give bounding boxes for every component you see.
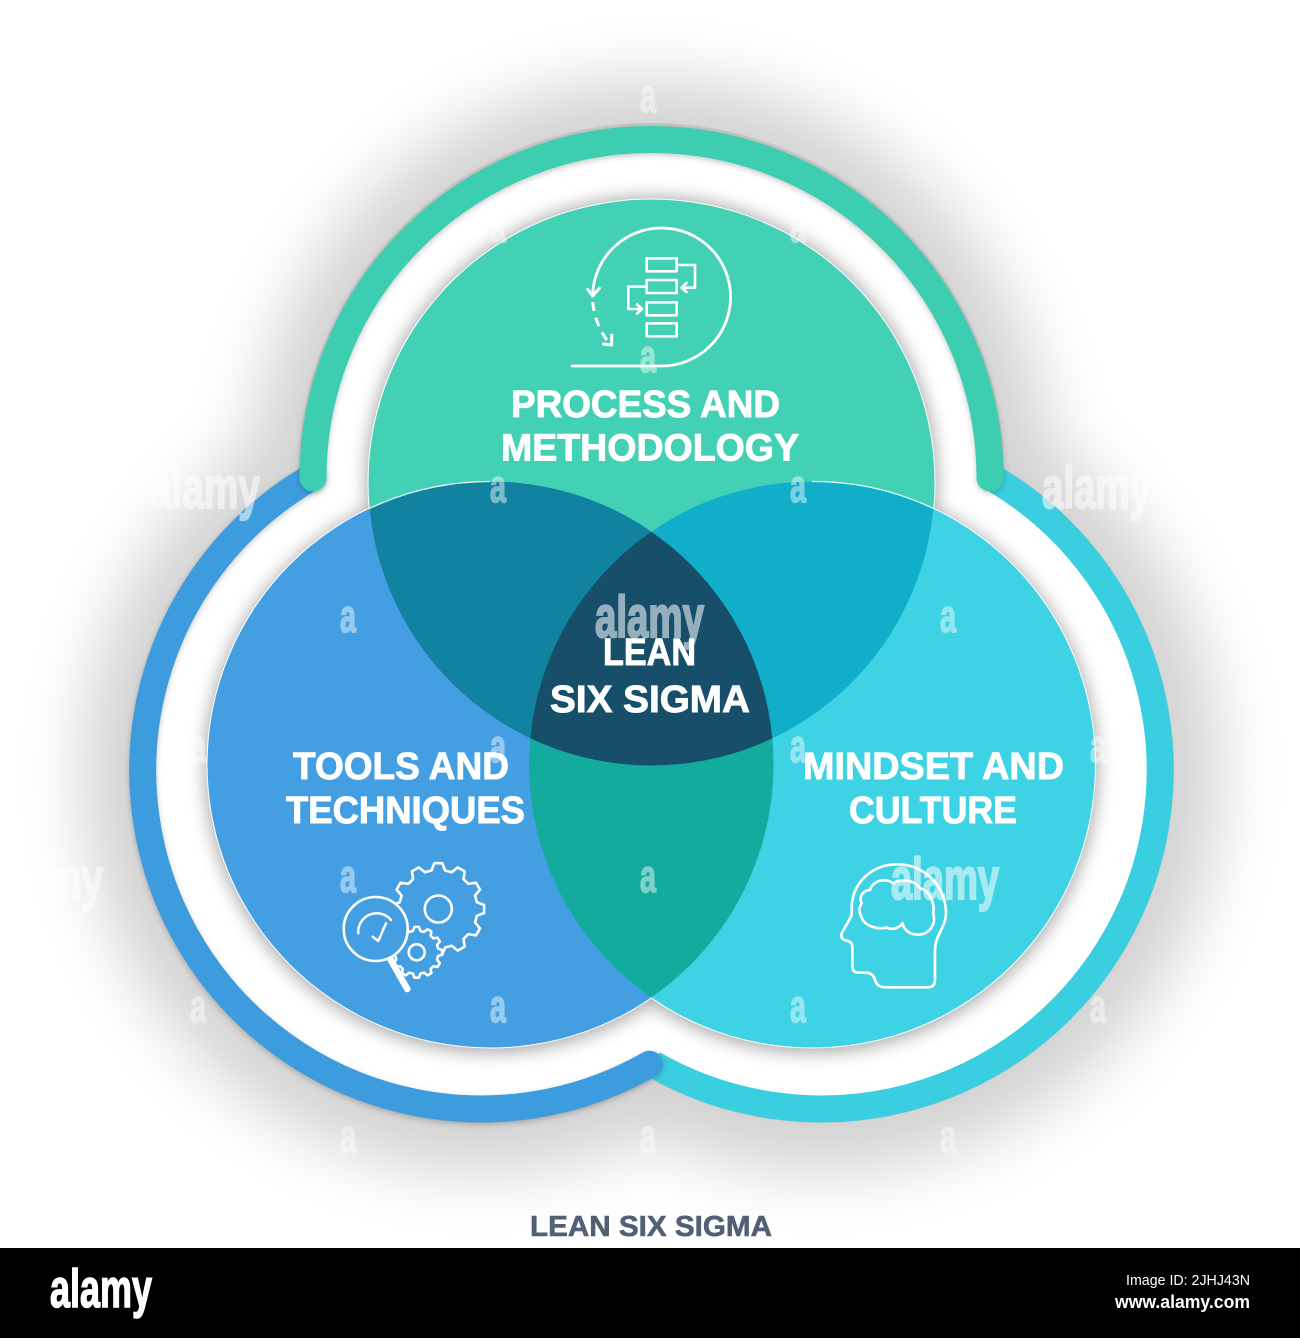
watermark tiles: a: [1090, 720, 1106, 772]
watermark tiles: a: [490, 720, 506, 772]
watermark tiles: a: [190, 980, 206, 1032]
watermark logos: alamy: [150, 456, 260, 521]
footer image id: Image ID: 2JHJ43N: [1126, 1272, 1250, 1289]
watermark logos: alamy: [595, 585, 704, 650]
watermark logos: [0, 456, 1151, 912]
ring: blue outer arc: [143, 476, 650, 1109]
watermark tiles: a: [190, 720, 206, 772]
overlap: process and mindset: [652, 482, 934, 738]
label: tools and techniques: [286, 746, 525, 832]
label: lean six sigma centre: [550, 632, 750, 721]
circle: mindset and culture: [529, 482, 1095, 1048]
icon: process cycle with flowchart: [572, 228, 731, 366]
circle: tools and techniques: [208, 482, 774, 1048]
watermark tiles: a: [340, 1110, 356, 1162]
watermark tiles: a: [340, 590, 356, 642]
label: lean six sigma centre: SIX SIGMA: [550, 679, 750, 721]
label: process and methodology: METHODOLOGY: [501, 428, 799, 470]
watermark logos: alamy: [891, 847, 999, 912]
overlap: centre lean six sigma: [530, 532, 772, 766]
watermark tiles: a: [640, 1110, 656, 1162]
watermark tiles: a: [490, 460, 506, 512]
watermark tiles: a: [640, 330, 656, 382]
inner shadow around circles: [206, 198, 1097, 1052]
label: mindset and culture: [803, 746, 1064, 832]
caption: lean six sigma: LEAN SIX SIGMA: [530, 1211, 772, 1243]
watermark logos: alamy: [1042, 456, 1151, 521]
label: lean six sigma centre: LEAN: [603, 632, 696, 674]
watermark tiles: a: [790, 720, 806, 772]
label: mindset and culture: MINDSET AND: [803, 746, 1064, 788]
watermark tiles: a: [940, 590, 956, 642]
footer bar: [0, 1248, 1300, 1338]
label: tools and techniques: TOOLS AND: [293, 746, 509, 788]
icon: magnifier and gears: [344, 863, 484, 989]
watermark tiles: a: [1240, 850, 1256, 902]
overlap: tools and mindset: [529, 532, 774, 998]
watermark tiles: a: [640, 850, 656, 902]
label: mindset and culture: CULTURE: [849, 790, 1017, 832]
label: tools and techniques: TECHNIQUES: [286, 790, 525, 832]
icon: head with brain: [841, 864, 946, 987]
footer url: www.alamy.com: [1114, 1292, 1250, 1312]
ring: green outer arc: [313, 139, 990, 478]
watermark tiles: a: [490, 980, 506, 1032]
soft outer shadow: [85, 82, 1218, 1170]
watermark tiles: a: [490, 200, 506, 252]
overlap: process and tools: [370, 482, 651, 738]
watermark tiles: a: [1090, 980, 1106, 1032]
white hairline behind circles: [206, 198, 1096, 1048]
footer logo: alamy: alamy: [50, 1259, 152, 1319]
watermark tiles: a: [790, 200, 806, 252]
watermark tiles: a: [340, 850, 356, 902]
watermark tiles: a: [790, 460, 806, 512]
watermark tiles: a: [940, 1110, 956, 1162]
watermark tiles: a: [640, 70, 656, 122]
label: process and methodology: [501, 384, 799, 470]
watermark tiles: a: [790, 980, 806, 1032]
label: process and methodology: PROCESS AND: [511, 384, 780, 426]
watermark tiles: [190, 70, 1256, 1162]
thin grey edge of outer ring: [129, 123, 1174, 1123]
ring: teal outer arc: [653, 476, 1160, 1109]
circle: process and methodology: [368, 200, 934, 766]
venn diagram circles: [200, 198, 1100, 1060]
white band: [147, 141, 1156, 1105]
hairline highlights: [369, 481, 934, 509]
